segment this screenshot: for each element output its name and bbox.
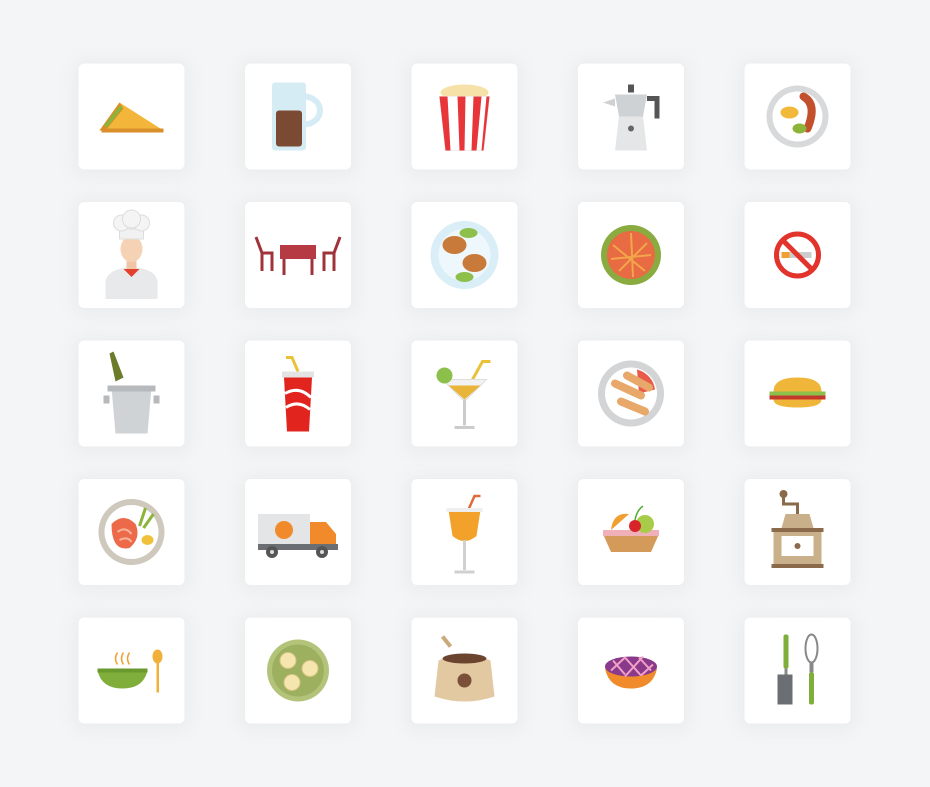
card: coffee sack [404, 612, 524, 732]
card: fruit tart [571, 474, 691, 594]
card: no smoking [738, 197, 858, 317]
card: coffee grinder [738, 474, 858, 594]
card: popcorn [404, 58, 524, 178]
card: chicken plate [404, 197, 524, 317]
card: sandwich [72, 58, 192, 178]
card: soup bowl [72, 612, 192, 732]
card: salmon plate [72, 474, 192, 594]
card: pizza [571, 197, 691, 317]
card: soda cup [238, 336, 358, 456]
card: spatula and whisk [738, 612, 858, 732]
card: table and chairs [238, 197, 358, 317]
card: mug [238, 58, 358, 178]
card: burger [738, 336, 858, 456]
card: juice glass [404, 474, 524, 594]
card: plate with food [738, 58, 858, 178]
card: pie [571, 612, 691, 732]
card: moka pot [571, 58, 691, 178]
card: chef [72, 197, 192, 317]
card: green plate [238, 612, 358, 732]
card: champagne bucket [72, 336, 192, 456]
card: delivery truck [238, 474, 358, 594]
card: cocktail [404, 336, 524, 456]
card: rolls plate [571, 336, 691, 456]
